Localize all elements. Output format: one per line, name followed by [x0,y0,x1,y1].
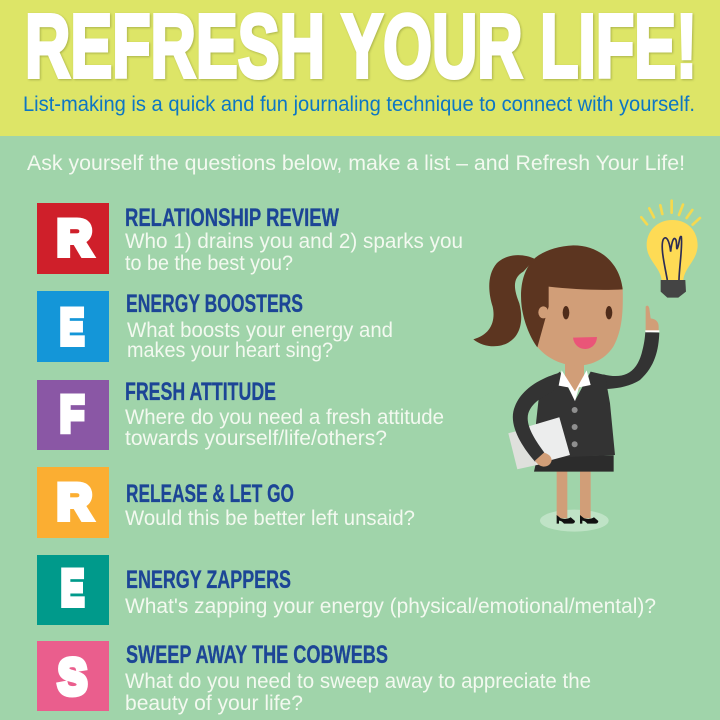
ear [538,306,548,318]
letter tile F [37,380,109,450]
shoes [557,515,598,524]
description: to be the best you? [125,252,293,275]
description: What do you need to sweep away to appreciate the [125,670,591,693]
eyes [563,306,612,319]
left arm [513,373,560,462]
description: Who 1) drains you and 2) sparks you [125,230,463,253]
row: energy boosters [37,290,393,362]
mouth [573,337,597,349]
bulb base [661,280,686,298]
letter tile S [37,641,109,711]
bulb glass [647,220,698,280]
description [125,406,444,450]
description: beauty of your life? [125,692,303,715]
letter tile R [37,467,109,538]
description: makes your heart sing? [127,339,333,362]
heading: RELATIONSHIP REVIEW [125,204,339,232]
description: What's zapping your energy (physical/emotional/mental)? [125,595,656,618]
hair [521,245,623,347]
ground ellipse [540,510,609,532]
description: Would this be better left unsaid? [125,507,415,530]
description [125,230,463,275]
row: sweep away the cobwebs [37,641,591,715]
neck [565,360,584,397]
description: Where do you need a fresh attitude [125,406,444,429]
row: energy zappers [37,555,656,625]
row: release and let go [37,467,415,538]
intro line: Ask yourself the questions below, make a list – and Refresh Your Life! [27,152,685,175]
row: fresh attitude [37,378,444,450]
tablet [508,417,570,469]
collar [559,370,591,401]
heading: SWEEP AWAY THE COBWEBS [126,641,388,669]
skirt [534,455,614,472]
heading: ENERGY ZAPPERS [126,566,291,594]
description [125,670,591,715]
illustration: woman with light bulb [473,201,700,532]
letter tile E [37,291,109,362]
description: towards yourself/life/others? [125,427,387,450]
left hand [535,453,552,467]
bulb rays [641,201,700,225]
legs [557,470,591,518]
jacket [536,372,615,458]
ponytail [473,255,535,346]
light bulb [641,201,700,298]
heading: FRESH ATTITUDE [125,378,276,406]
header band [0,0,720,136]
description [127,319,393,362]
raised hand [646,306,659,331]
buttons [572,407,578,447]
letter tile S: S [58,649,87,705]
letter tile R: R [57,210,92,266]
filament [662,236,682,280]
letter tile R: R [57,474,92,530]
row: relationship review [37,203,463,275]
letter tile F: F [60,386,84,442]
description: What boosts your energy and [127,319,393,342]
letter tile E: E [60,299,84,355]
cuff [645,330,659,332]
letter tile E [37,555,109,625]
letter tile E: E [61,560,84,616]
heading: RELEASE & LET GO [126,480,294,508]
face [537,285,623,366]
raised arm [603,332,659,389]
heading: ENERGY BOOSTERS [126,290,303,318]
letter tile R [37,203,109,274]
subtitle: List-making is a quick and fun journaling technique to connect with yourself. [23,93,695,116]
